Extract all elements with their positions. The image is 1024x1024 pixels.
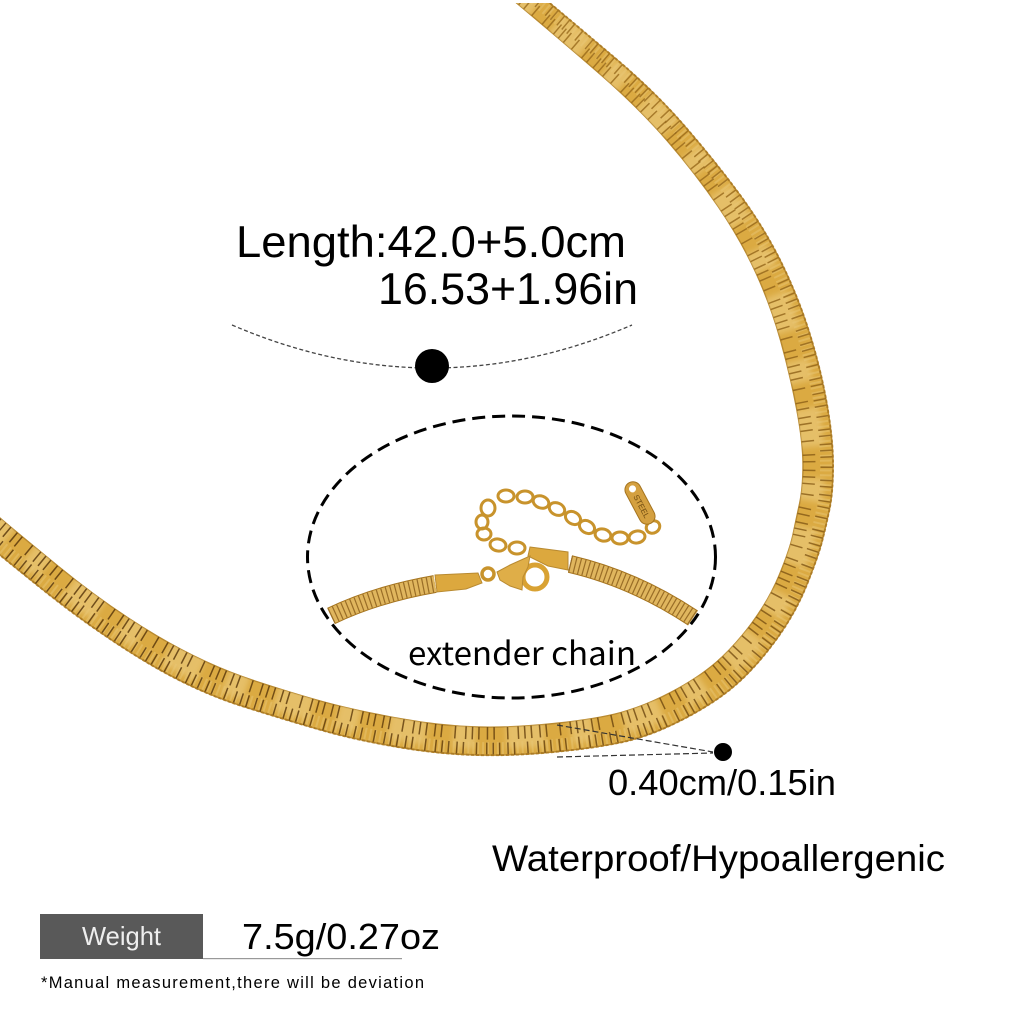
steel tag [622, 479, 658, 527]
necklace: gold herringbone chain [0, 0, 833, 755]
label: features: Waterproof/Hypoallergenic [492, 837, 945, 879]
extender links [476, 490, 662, 554]
weight label box [40, 914, 203, 959]
label: chain width: 0.40cm/0.15in [608, 762, 836, 803]
label: extender chain: extender chain [408, 629, 636, 675]
length dashed arc with dot marker [232, 325, 632, 383]
weight underline [203, 958, 402, 959]
footnote: *Manual measurement,there will be deviation [41, 974, 424, 992]
weight row [40, 914, 440, 959]
weight label text: Weight [82, 921, 162, 951]
detail: clasp and extender chain [331, 479, 693, 618]
steel tag: STEEL [631, 493, 651, 520]
callout: dashed ellipse around extender chain [308, 416, 716, 698]
end caps [435, 547, 568, 592]
width measurement lines with dot marker [557, 725, 732, 761]
chain ends [331, 564, 693, 618]
title: length measurement [236, 218, 638, 314]
weight value: 7.5g/0.27oz [242, 916, 440, 957]
title: length measurement: 16.53+1.96in [378, 265, 638, 314]
lobster clasp [482, 556, 547, 590]
title: length measurement: Length:42.0+5.0cm [236, 218, 626, 267]
